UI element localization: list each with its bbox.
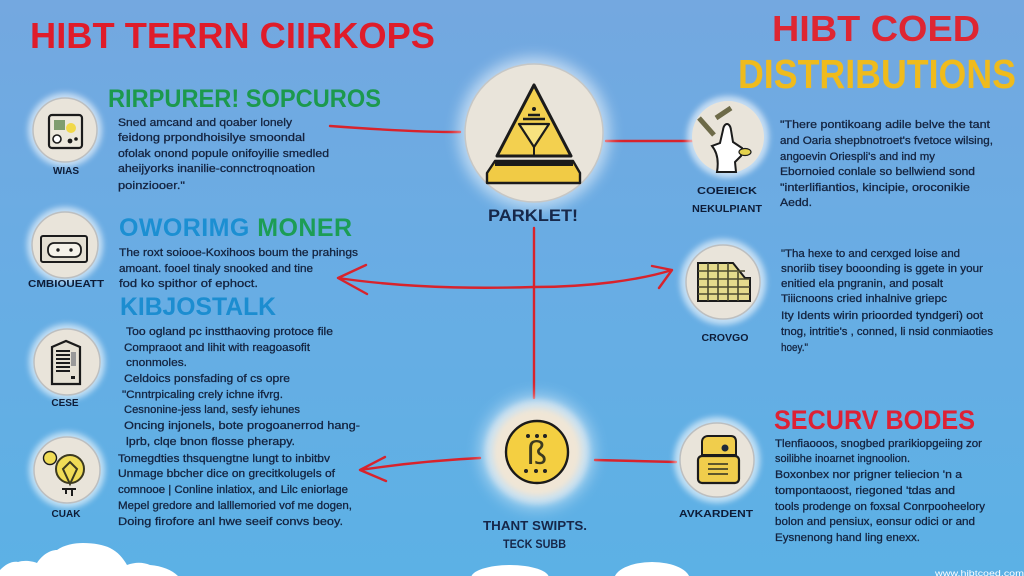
body text: Ity Idents wirin prioorded tyndgeri) oot <box>781 310 983 322</box>
panel: central triangle node <box>458 57 610 225</box>
body text: "interlifiantios, kincipie, oroconikie <box>780 182 970 194</box>
body text: ofolak onond popule onifoyilie smedled <box>118 148 329 160</box>
body text: Eysnenong hand ling enexx. <box>775 532 920 544</box>
icon label: CUAK <box>52 509 81 520</box>
glow <box>458 57 610 209</box>
icon disc <box>680 239 766 325</box>
body text: Doing firofore anl hwe seeif convs beoy. <box>118 516 343 528</box>
panel: right item one <box>687 96 993 215</box>
body text: and Oaria shepbnotroet's fvetoce wilsing, <box>780 135 993 147</box>
body text: Celdoics ponsfading of cs opre <box>124 373 290 385</box>
heading: RIRPURER! SOPCUROS <box>108 85 381 113</box>
body text: soilibhe inoarnet ingnoolion. <box>775 453 910 465</box>
body text: The roxt soiooe-Koxihoos boum the prahings <box>119 247 359 259</box>
body text <box>118 117 329 192</box>
heading: OWORIMG MONER <box>119 214 352 242</box>
icon label: CESE <box>51 398 79 409</box>
icon: coin <box>506 421 568 483</box>
icon label: AVKARDENT <box>679 509 753 520</box>
icon: triangle with goblet on pedestal <box>487 85 580 183</box>
body text: Ebornoied conlale so bellwiend sond <box>780 166 975 178</box>
body text: hoey." <box>781 342 808 354</box>
body text: poinziooer." <box>118 180 185 192</box>
body text: Compraoot and lihit with reagoasofit <box>124 342 310 354</box>
body text: bolon and pensiux, eonsur odici or and <box>775 516 975 528</box>
panel: coin icon left <box>29 432 105 520</box>
icon disc <box>28 93 102 167</box>
body text: Cesnonine-jess land, sesfy iehunes <box>124 404 301 416</box>
body text: Too ogland pc instthaoving protoce file <box>126 326 333 338</box>
body text: cnonmoles. <box>126 357 187 369</box>
icon label: CROVGO <box>702 333 749 344</box>
title line: HIBT COED: HIBT COED <box>772 8 980 49</box>
body text: enitied ela pngranin, and posalt <box>781 278 943 290</box>
body text: Oncing injonels, bote progoanerrod hang- <box>124 420 360 432</box>
body text: feidong prpondhoisilye smoondal <box>118 132 305 144</box>
label: THANT SWIPTS. <box>483 518 587 533</box>
body text <box>119 247 359 290</box>
body text <box>780 119 993 209</box>
body text <box>781 248 994 354</box>
body text: Boxonbex nor prigner teliecion 'n a <box>775 469 963 481</box>
body text: comnooe | Conline inlatiox, and Lilc eniorlage <box>118 484 348 496</box>
icon disc <box>674 417 760 503</box>
arrow: double headed middle <box>338 265 672 294</box>
halo <box>479 394 595 510</box>
label: PARKLET! <box>488 207 578 225</box>
title: left: HIBT TERRN CIIRKOPS <box>30 15 435 56</box>
panel: oworimg moner <box>27 207 359 290</box>
body text: lprb, clqe bnon flosse pherapy. <box>126 436 295 448</box>
body text: aheijyorks inanilie-connctroqnoation <box>118 163 315 175</box>
ring <box>485 400 589 504</box>
title: right <box>738 8 1016 97</box>
clouds <box>0 543 690 576</box>
body text: amoant. fooel tinaly snooked and tine <box>119 263 313 275</box>
body text: Tlenfiaooos, snogbed prarikiopgeiing zor <box>775 438 982 450</box>
body text: tools prodenge on foxsal Conrpooheelory <box>775 501 986 513</box>
body text: Tomegdties thsquengtne lungt to inbitbv <box>118 453 331 465</box>
icon label: WIAS <box>53 166 79 177</box>
body text: Mepel gredore and lalllemoried vof me dogen, <box>118 500 352 512</box>
icon label: COEIEICK <box>697 186 758 197</box>
panel: security bodes <box>674 405 986 544</box>
icon label: NEKULPIANT <box>692 204 762 215</box>
icon label: CMBIOUEATT <box>28 279 104 290</box>
arrow: top left <box>330 126 460 132</box>
panel: ripurer sopcuros <box>28 85 381 192</box>
icon disc <box>29 432 105 508</box>
body text: Tiiicnoons cried inhalnive griepc <box>781 293 948 305</box>
arrow: bottom left <box>360 457 480 481</box>
disc <box>465 64 603 202</box>
body text: angoevin Oriespli's and ind my <box>780 151 936 163</box>
icon disc <box>687 96 769 178</box>
body text: "There pontikoang adile belve the tant <box>780 119 990 131</box>
body text: "Tha hexe to and cerxged loise and <box>781 248 960 260</box>
body text: tnog, intritie's , conned, li nsid conmiaoties <box>781 326 994 338</box>
coin glyph: ß <box>527 434 547 471</box>
icon disc <box>27 207 103 283</box>
icon label <box>692 186 762 215</box>
cream disc <box>493 408 581 496</box>
arrow: top right <box>606 140 692 142</box>
body text: Unmage bbcher dice on grecitkolugels of <box>118 468 336 480</box>
body text: fod ko spithor of ephoct. <box>119 278 258 290</box>
body text: "Cnntrpicaling crely ichne ifvrg. <box>122 389 283 401</box>
body text: Sned amcand and qoaber lonely <box>118 117 293 129</box>
heading: KIBJOSTALK <box>120 293 276 321</box>
panel: right item two <box>680 239 994 354</box>
heading: SECURV BODES <box>774 405 975 435</box>
body text <box>775 438 986 544</box>
body text <box>118 326 360 528</box>
body text: Aedd. <box>780 197 812 209</box>
connector arrows <box>330 126 692 481</box>
label: TECK SUBB <box>503 537 566 551</box>
arrow: bottom right <box>595 460 676 462</box>
icon disc <box>29 324 105 400</box>
body text: snoriib tisey booonding is ggete in your <box>781 263 983 275</box>
arrow: central vertical <box>533 228 535 398</box>
panel: coin node <box>479 394 595 551</box>
body text: tompontaoost, riegoned 'tdas and <box>775 485 955 497</box>
label <box>483 518 587 551</box>
panel: kibjostalk <box>29 293 360 528</box>
